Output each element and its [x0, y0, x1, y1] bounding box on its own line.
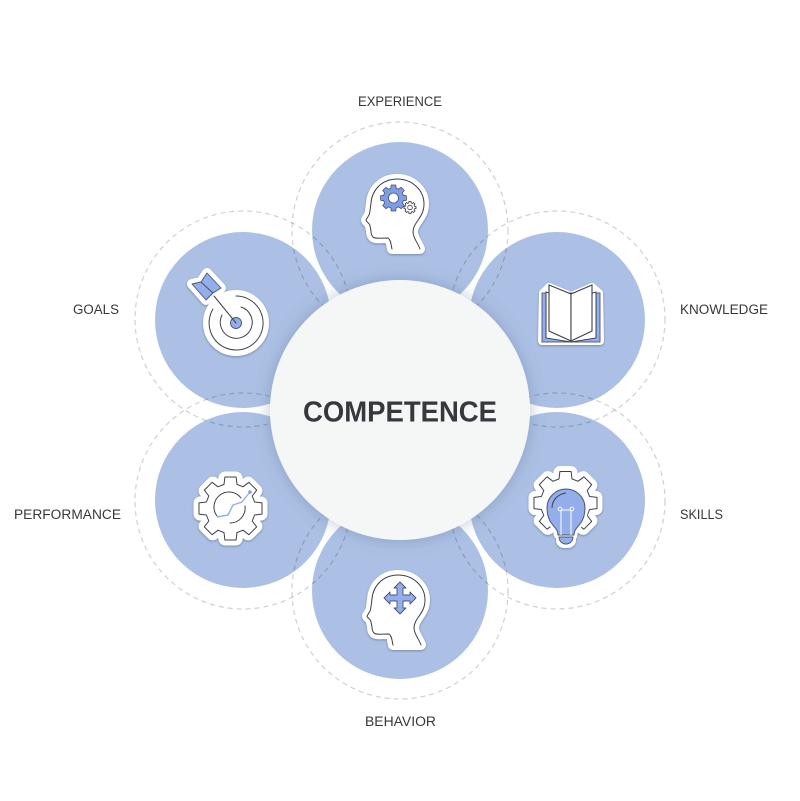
panel: experience petal [312, 142, 488, 318]
panel: goals petal [155, 232, 331, 408]
central circle [270, 280, 530, 540]
panel: knowledge petal [469, 232, 645, 408]
title: COMPETENCE [303, 396, 497, 428]
icon: open book [542, 285, 600, 342]
icon: gear with growth line [199, 477, 262, 540]
icon: head with arrows [367, 575, 425, 645]
panel: skills petal [469, 412, 645, 588]
label: behavior: BEHAVIOR [365, 714, 436, 729]
label: experience: EXPERIENCE [358, 94, 442, 109]
label: goals: GOALS [73, 302, 119, 317]
panel: behavior petal [312, 503, 488, 679]
label: performance: PERFORMANCE [14, 507, 121, 522]
icon: target with arrow [192, 273, 264, 351]
panel: performance petal [155, 412, 331, 588]
icon: light bulb in gear [534, 472, 597, 548]
label: skills: SKILLS [680, 507, 723, 522]
label: knowledge: KNOWLEDGE [680, 302, 768, 317]
icon: head with gears [366, 179, 424, 249]
